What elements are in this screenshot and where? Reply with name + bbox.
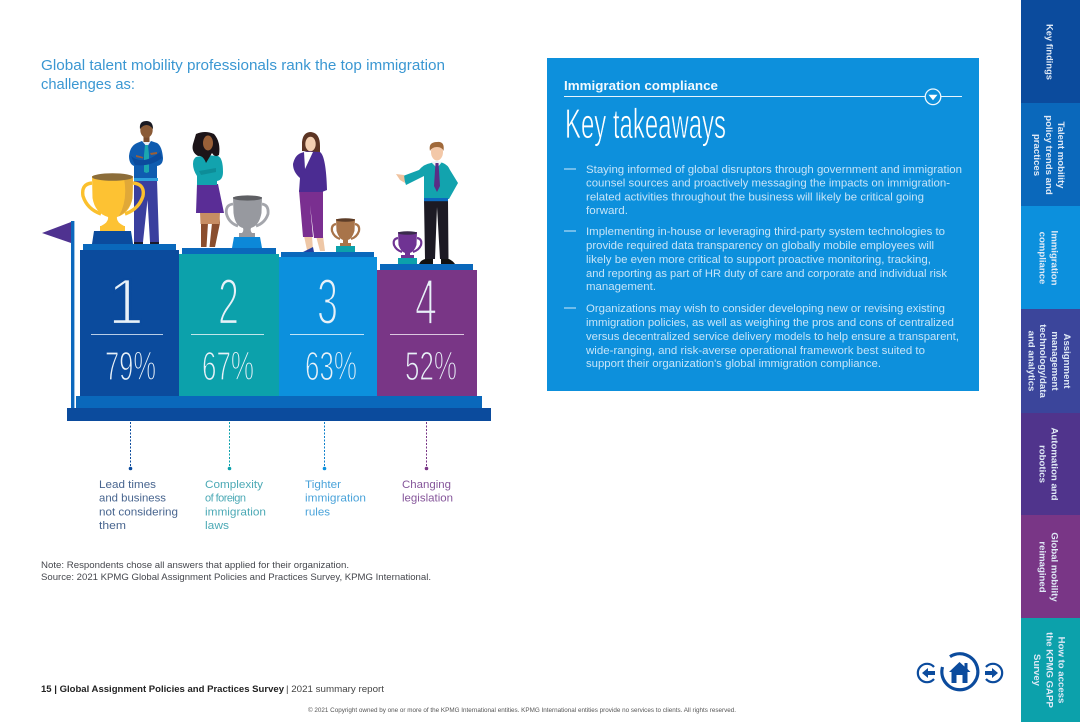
icon: forward arrow: [985, 664, 1002, 682]
copyright: © 2021 Copyright owned by one or more of the KPMG International entities. KPMG International entities provide no services to clients. All rights reserved.: [308, 707, 736, 714]
category: lead times: Lead times: [99, 479, 157, 491]
takeaway 1: Staying informed of global disruptors through government and immigration: [586, 164, 962, 176]
takeaway 3: support their organization's global immigration compliance.: [586, 358, 881, 370]
icon: house: [942, 654, 978, 690]
podium 3: 63%: 63%: [305, 343, 357, 389]
takeaway 2: provide required data transparency on globally mobile employees will: [586, 240, 934, 252]
podium 1: 79%: 79%: [105, 343, 156, 389]
podium 2: 67%: [179, 248, 279, 396]
panel heading: Key takeaways: [565, 100, 726, 147]
panel section label: Immigration compliance: [564, 78, 718, 93]
category: changing legislation: [402, 422, 453, 505]
takeaway 3: versus decentralized service delivery models to help ensure a transparent,: [586, 331, 959, 343]
category: lead times: and business: [99, 493, 167, 505]
category: lead times: them: [99, 520, 126, 532]
category: tighter rules: immigration: [305, 493, 366, 505]
title: challenges as:: [41, 76, 135, 93]
category: complexity: laws: [205, 520, 230, 532]
category: tighter rules: rules: [305, 506, 331, 518]
tab: assignment management: technology/data: [1037, 324, 1048, 398]
category: lead times: [99, 422, 178, 532]
podium base: [67, 396, 491, 421]
takeaway 1: counsel sources and proactively messaging the impacts on immigration-: [586, 178, 951, 190]
podium chart: [42, 121, 491, 421]
podium 1: 79%: 1: [108, 265, 144, 338]
podium 3: 63%: [279, 252, 377, 396]
figure: man in teal shirt pointing: [396, 142, 458, 264]
podium 2: 67%: 67%: [202, 343, 254, 389]
takeaway 3: wide-ranging, and risk-averse operational framework best suited to: [585, 345, 925, 357]
podium 4: 52%: 4: [415, 265, 437, 338]
tab: key findings: [1021, 0, 1080, 103]
tab: immigration compliance: Immigration: [1048, 231, 1060, 286]
category: changing legislation: Changing: [402, 479, 451, 491]
takeaway 2: [564, 226, 948, 293]
tab: how to access: [1021, 618, 1080, 722]
panel: key takeaways: [547, 58, 979, 391]
note and source: [41, 560, 431, 583]
category: complexity: Complexity: [205, 479, 264, 491]
tab: automation: [1021, 413, 1080, 515]
category: changing legislation: legislation: [402, 493, 453, 505]
icon: dropdown arrow on rule: [564, 89, 962, 105]
tab: global mobility: [1021, 515, 1080, 618]
category: complexity: immigration: [205, 506, 266, 518]
icon: gold trophy: [83, 173, 143, 244]
tab: assignment management: and analytics: [1026, 331, 1036, 391]
tab: automation: robotics: [1036, 445, 1048, 483]
figure: woman in purple suit: [293, 132, 327, 252]
icon: back arrow: [918, 664, 935, 682]
figure: man in navy sweater: [129, 121, 163, 244]
tab: talent mobility: [1021, 103, 1080, 206]
tab: immigration compliance: compliance: [1036, 232, 1048, 284]
takeaway 1: [564, 164, 962, 217]
tab: talent mobility: policy trends and: [1043, 115, 1054, 195]
category: complexity: of foreign: [205, 493, 246, 505]
icon: bronze trophy: [332, 218, 359, 252]
takeaway 3: immigration policies, as well as weighing the pros and cons of centralized: [586, 317, 954, 329]
tab: automation: Automation and: [1048, 427, 1060, 501]
icon: silver trophy: [226, 195, 268, 248]
note and source: Source: 2021 KPMG Global Assignment Policies and Practices Survey, KPMG International.: [41, 572, 431, 583]
tab: immigration compliance: [1021, 206, 1080, 309]
takeaway 2: likely be even more critical to support proactive monitoring, tracking,: [586, 254, 931, 266]
tab: how to access: Survey: [1031, 654, 1042, 687]
category: tighter rules: [305, 422, 366, 518]
tab: talent mobility: practices: [1031, 134, 1042, 176]
title: Global talent mobility professionals rank the top immigration: [41, 57, 445, 74]
takeaway 3: [564, 303, 959, 370]
category: tighter rules: Tighter: [305, 479, 341, 491]
tab: how to access: the KPMG GAPP: [1044, 632, 1054, 708]
note and source: Note: Respondents chose all answers that applied for their organization.: [41, 560, 349, 571]
podium 2: 67%: 2: [218, 265, 239, 338]
figure: woman in teal top: [193, 132, 224, 247]
category: complexity: [205, 422, 266, 532]
podium 3: 63%: 3: [317, 265, 338, 338]
tab: assignment management: Assignment: [1061, 334, 1072, 389]
icon: home navigation: [918, 654, 1002, 690]
footer page title: | 2021 summary report: [286, 684, 384, 695]
title: [41, 57, 445, 93]
tab: key findings: Key findings: [1044, 24, 1054, 80]
footer page title: 15 | Global Assignment Policies and Practices Survey: [41, 684, 285, 695]
takeaway 1: related activities throughout the business will likely be critical going: [586, 191, 924, 203]
tab: how to access: How to access: [1056, 637, 1066, 703]
tab: assignment management: management: [1049, 331, 1060, 391]
takeaway 2: management.: [586, 281, 656, 293]
takeaway 3: Organizations may wish to consider developing new or revising existing: [586, 303, 945, 315]
tab: talent mobility: Talent mobility: [1055, 122, 1066, 189]
sidebar navigation tabs: [1021, 0, 1080, 722]
podium 4: 52%: 52%: [405, 343, 457, 389]
tab: assignment management: [1021, 309, 1080, 413]
tab: global mobility: reimagined: [1036, 541, 1048, 593]
icon: purple trophy: [394, 231, 421, 264]
takeaway 2: Implementing in-house or leveraging third-party system technologies to: [586, 226, 945, 238]
takeaway 2: and reporting as part of HR duty of care and corporate and individual risk: [586, 268, 948, 280]
takeaway 1: forward.: [586, 205, 628, 217]
podium 1: 79%: [80, 244, 179, 396]
podium 4: 52%: [377, 264, 477, 396]
category: lead times: not considering: [99, 506, 178, 518]
tab: global mobility: Global mobility: [1048, 532, 1060, 602]
icon: flag: [42, 221, 74, 408]
